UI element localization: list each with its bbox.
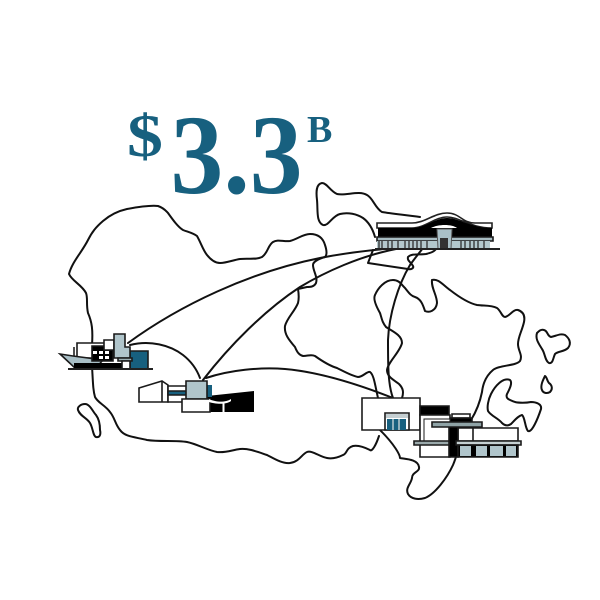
title: $3.3B: 3.3 — [170, 93, 303, 218]
title: $3.3B: $ — [127, 103, 163, 170]
building: northern terminal — [375, 213, 500, 249]
building: central campus — [139, 381, 254, 412]
connector arcs between facilities — [128, 248, 423, 398]
map of Canada outline — [69, 183, 570, 499]
title: $3.3B: B — [307, 109, 332, 151]
title: $3.3B — [127, 93, 332, 218]
building: southern complex — [362, 398, 521, 457]
building: west coast ship and offices — [60, 334, 153, 369]
